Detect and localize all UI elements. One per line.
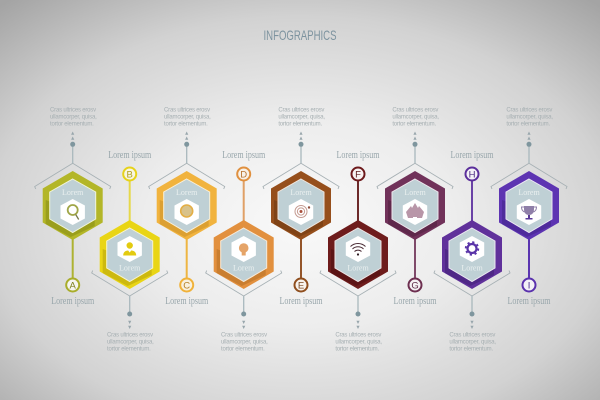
hexagon A	[43, 171, 103, 240]
stem H	[471, 181, 473, 222]
icon: magnifier	[68, 205, 79, 220]
icon hex G	[403, 199, 427, 225]
badge I	[522, 278, 536, 292]
connector E	[263, 132, 339, 189]
label F: Lorem ipsum	[336, 150, 380, 161]
badge D: D	[240, 169, 247, 180]
icon: trophy	[522, 206, 536, 220]
description D: ullamcorper, quisa,	[221, 339, 268, 345]
description A: Cras ultrices erosv	[50, 108, 96, 114]
badge E	[294, 278, 308, 292]
step B	[92, 150, 168, 352]
description C: tortor elementum.	[164, 122, 208, 128]
description I: tortor elementum.	[506, 122, 550, 128]
description C: ullamcorper, quisa,	[164, 115, 211, 121]
description G: tortor elementum.	[392, 122, 436, 128]
description H: ullamcorper, quisa,	[449, 339, 496, 345]
lorem F: Lorem	[347, 264, 369, 272]
icon hex A	[60, 199, 85, 225]
description D: tortor elementum.	[221, 346, 265, 352]
lorem H: Lorem	[461, 264, 483, 272]
stem D	[243, 181, 245, 222]
stem G	[414, 238, 416, 279]
label G: Lorem ipsum	[394, 296, 437, 307]
connector H	[434, 270, 510, 329]
label H: Lorem ipsum	[450, 150, 494, 161]
stem E	[300, 238, 302, 279]
badge I: I	[528, 280, 530, 291]
description I: Cras ultrices erosv	[506, 108, 552, 114]
description A: tortor elementum.	[50, 122, 94, 128]
icon hex D	[232, 236, 256, 262]
badge G: G	[411, 280, 419, 291]
label E: Lorem ipsum	[280, 296, 323, 307]
icon hex B	[118, 236, 142, 262]
badge F: F	[355, 169, 361, 180]
lorem G: Lorem	[404, 188, 426, 197]
icon: light bulb	[239, 243, 248, 256]
connector A	[35, 132, 111, 189]
hexagon H	[442, 220, 502, 289]
step H	[434, 150, 510, 352]
icon hex I	[517, 199, 541, 225]
badge G	[408, 278, 422, 292]
badge A: A	[70, 280, 77, 291]
hexagon B	[100, 220, 160, 289]
step E	[263, 108, 339, 307]
badge H: H	[469, 169, 476, 180]
connector I	[491, 132, 567, 189]
label C: Lorem ipsum	[165, 296, 208, 307]
hexagon C	[157, 171, 217, 240]
step A	[35, 108, 111, 307]
badge A	[66, 278, 79, 292]
icon: gear	[466, 242, 478, 255]
lorem I: Lorem	[518, 188, 540, 197]
step G	[377, 108, 453, 307]
lorem B: Lorem	[119, 264, 141, 272]
description C: Cras ultrices erosv	[164, 108, 210, 114]
badge C	[180, 278, 193, 292]
description H: Cras ultrices erosv	[449, 332, 495, 338]
label D: Lorem ipsum	[222, 150, 265, 161]
label I: Lorem ipsum	[508, 296, 551, 307]
icon hex E	[289, 199, 313, 225]
description B: Cras ultrices erosv	[107, 332, 153, 338]
hexagon G	[385, 171, 445, 240]
label A: Lorem ipsum	[51, 296, 94, 307]
icon: wifi	[350, 244, 366, 256]
badge B: B	[127, 169, 133, 180]
stem I	[528, 238, 530, 279]
description E: ullamcorper, quisa,	[278, 115, 325, 121]
description F: Cras ultrices erosv	[335, 332, 381, 338]
description H: tortor elementum.	[449, 346, 493, 352]
hexagon E	[271, 171, 331, 240]
badge B	[123, 168, 136, 180]
description F: tortor elementum.	[335, 346, 379, 352]
step F	[320, 150, 396, 352]
connector G	[377, 132, 453, 189]
description D: Cras ultrices erosv	[221, 332, 267, 338]
icon: badge circle	[181, 205, 193, 217]
lorem C: Lorem	[176, 188, 198, 197]
stem C	[186, 238, 188, 279]
stem F	[357, 181, 359, 222]
connector F	[320, 270, 396, 329]
description F: ullamcorper, quisa,	[335, 339, 382, 345]
icon: person	[123, 242, 136, 256]
icon hex H	[460, 236, 484, 262]
title: INFOGRAPHICS	[264, 27, 336, 43]
connector D	[206, 270, 282, 329]
description B: tortor elementum.	[107, 346, 151, 352]
description E: tortor elementum.	[278, 122, 322, 128]
step D	[206, 150, 282, 352]
icon hex F	[346, 236, 370, 262]
hexagon I	[499, 171, 559, 240]
connector C	[149, 132, 225, 189]
badge E: E	[298, 280, 304, 291]
stem B	[129, 181, 131, 222]
lorem A: Lorem	[62, 188, 84, 197]
description G: ullamcorper, quisa,	[392, 115, 439, 121]
description I: ullamcorper, quisa,	[506, 115, 553, 121]
description B: ullamcorper, quisa,	[107, 339, 154, 345]
hexagon F	[328, 220, 388, 289]
badge F	[352, 168, 364, 180]
lorem D: Lorem	[233, 264, 255, 272]
icon: people	[406, 203, 424, 218]
stem A	[72, 238, 74, 279]
lorem E: Lorem	[290, 188, 312, 197]
description A: ullamcorper, quisa,	[50, 115, 97, 121]
label B: Lorem ipsum	[108, 150, 151, 161]
step I	[491, 108, 567, 307]
connector B	[92, 270, 168, 329]
badge C: C	[183, 280, 190, 291]
description E: Cras ultrices erosv	[278, 108, 324, 114]
icon: target	[295, 206, 310, 218]
icon hex C	[174, 199, 199, 225]
badge D	[237, 168, 250, 180]
hexagon D	[214, 220, 274, 289]
description G: Cras ultrices erosv	[392, 108, 438, 114]
badge H	[466, 168, 478, 180]
step C	[149, 108, 225, 307]
